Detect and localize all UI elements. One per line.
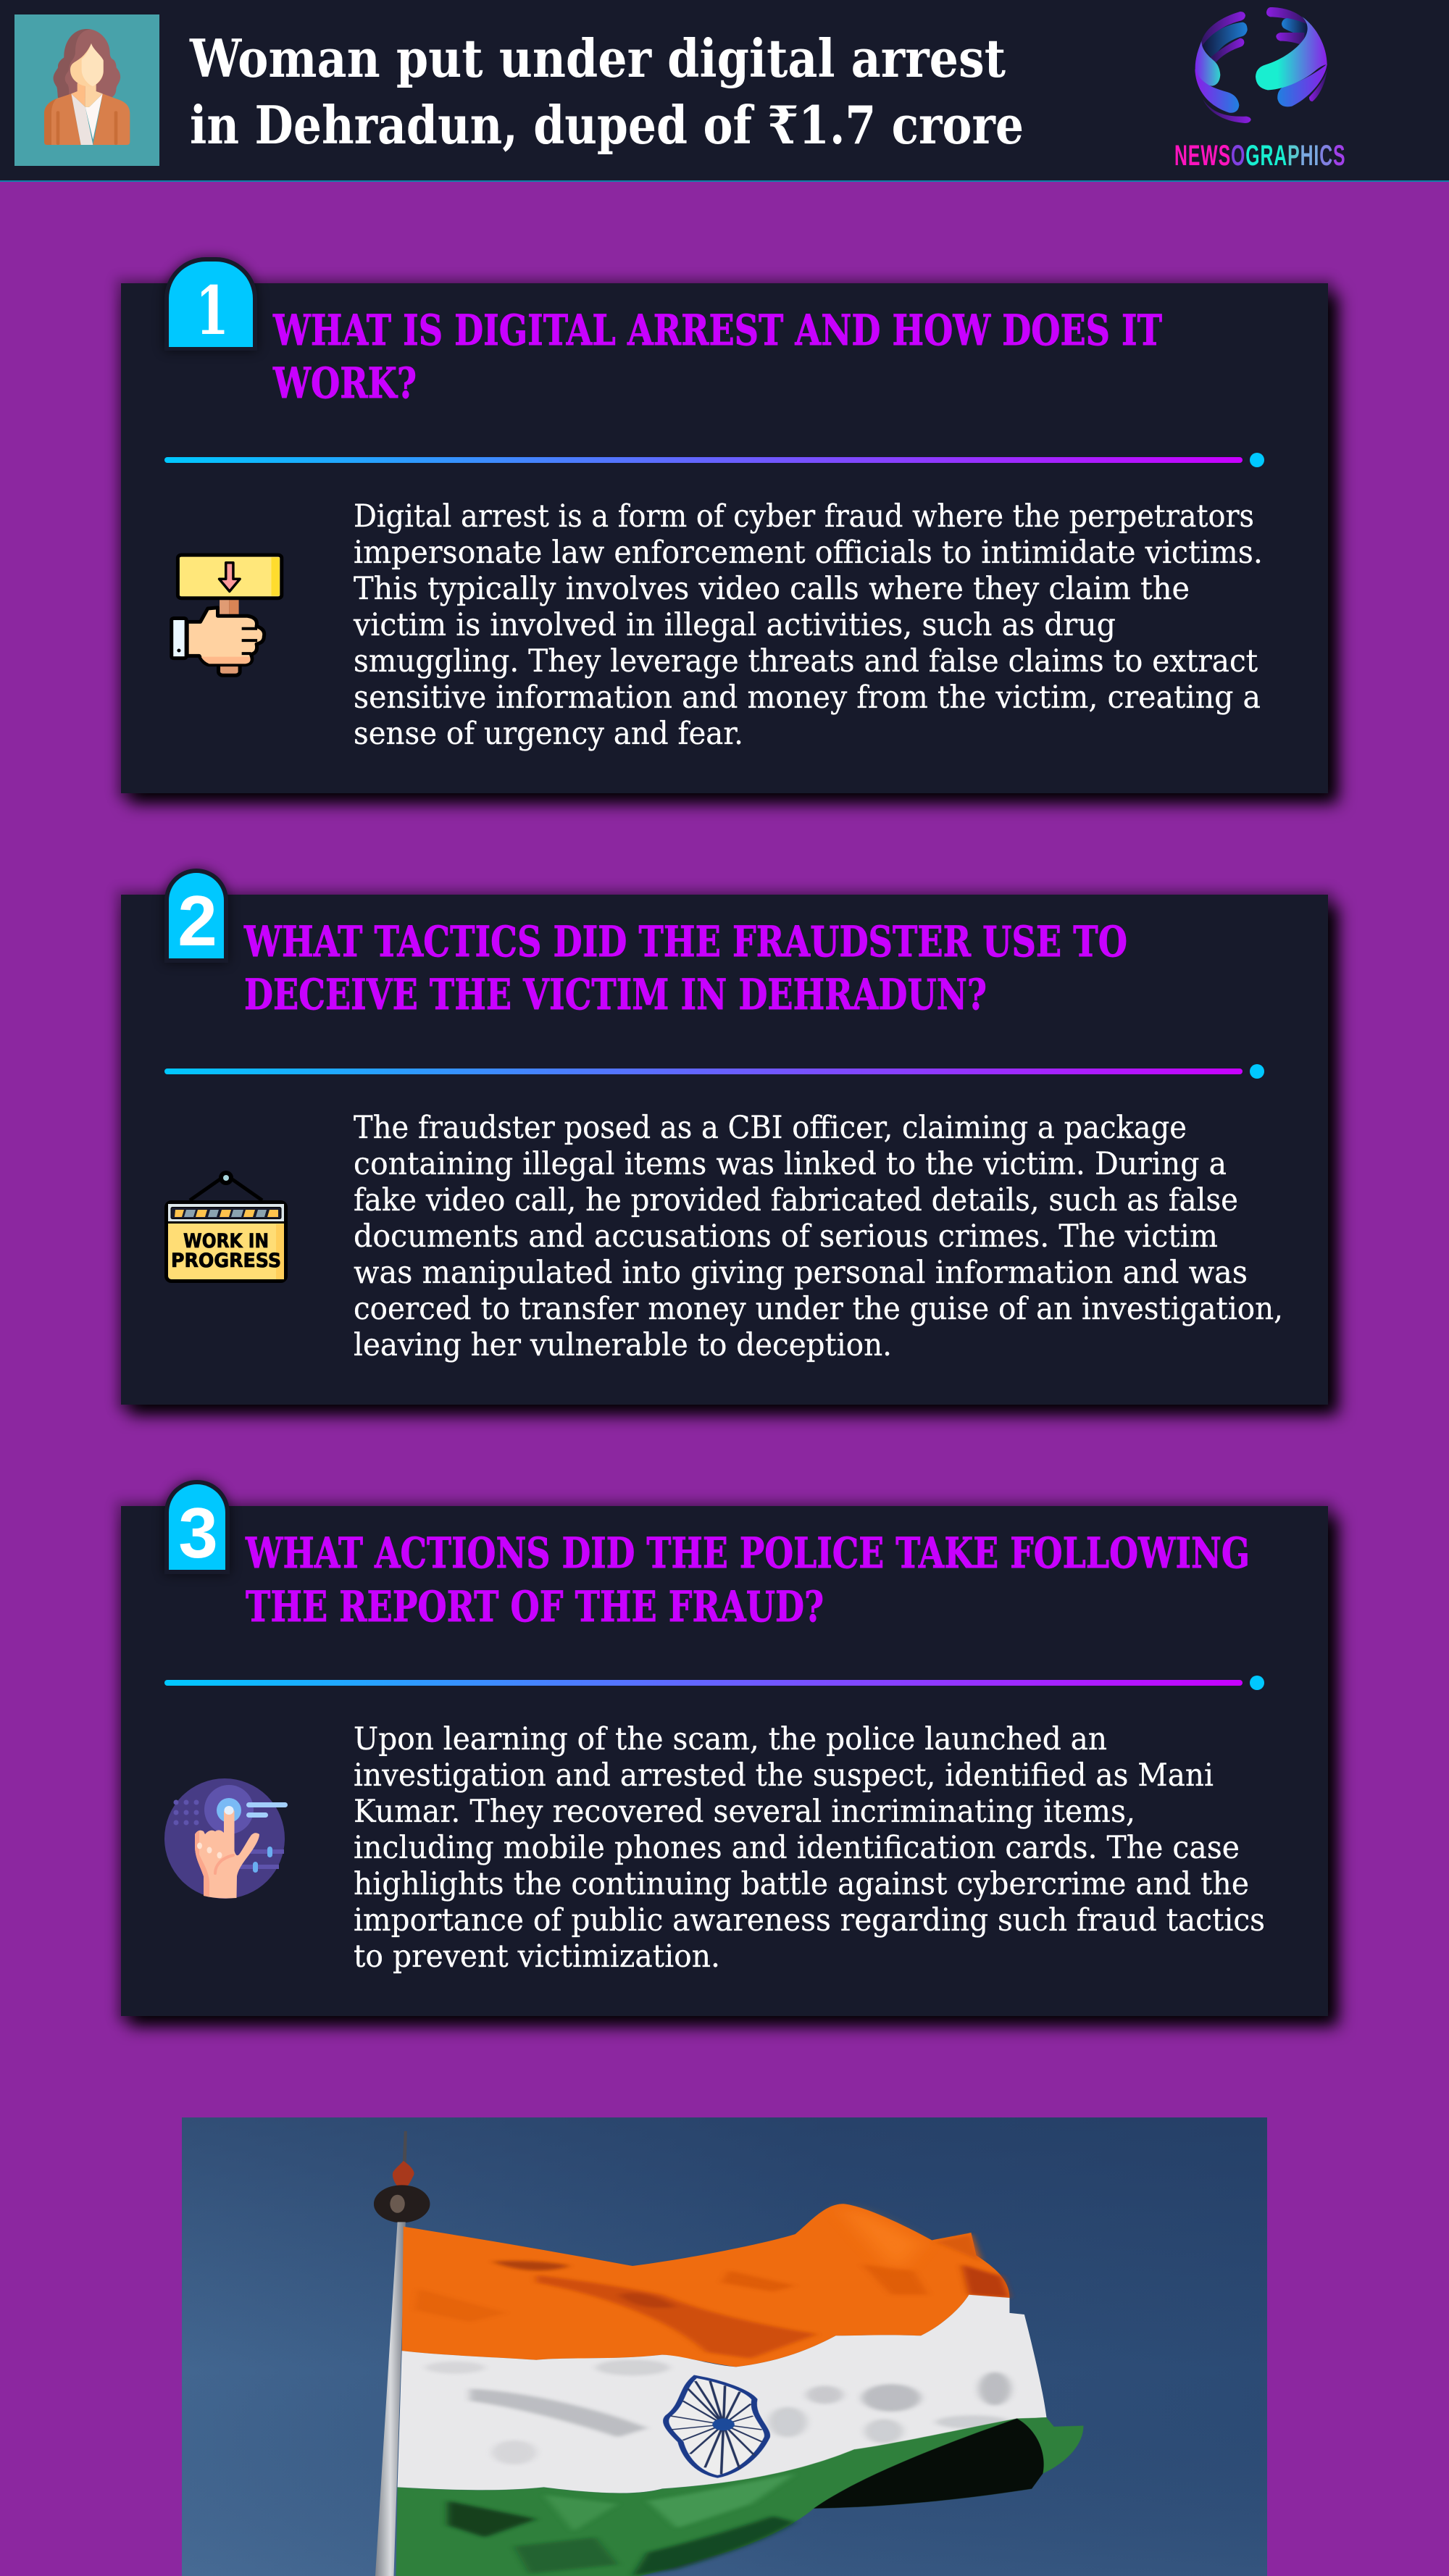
title	[189, 28, 1024, 156]
icon: woman avatar	[14, 14, 159, 166]
body text 2: fake video call, he provided fabricated details, such as false	[354, 1182, 1238, 1218]
flag: green band	[396, 2417, 1084, 2576]
flag: white band	[398, 2295, 1046, 2493]
title: Woman put under digital arrest	[189, 28, 1006, 89]
header bar	[0, 0, 1449, 182]
number badge 1: 1	[196, 272, 229, 350]
title: in Dehradun, duped of ₹1.7 crore	[190, 94, 1024, 156]
body text 1: smuggling. They leverage threats and false claims to extract	[354, 643, 1258, 679]
body text 1: This typically involves video calls where they claim the	[354, 571, 1190, 607]
flag: saffron band	[402, 2204, 1009, 2367]
heading 1	[272, 306, 1162, 408]
icon: work in progress sign: PROGRESS	[171, 1250, 281, 1272]
body text 2: The fraudster posed as a CBI officer, claiming a package	[354, 1110, 1187, 1146]
body text 2: was manipulated into giving personal information and was	[354, 1255, 1248, 1291]
heading 2: DECEIVE THE VICTIM IN DEHRADUN?	[244, 970, 987, 1019]
body text 3: highlights the continuing battle against cybercrime and the	[354, 1866, 1249, 1902]
logo: Newsographics	[1174, 7, 1345, 172]
number badge 2: 2	[178, 881, 217, 961]
body text 2: containing illegal items was linked to the victim. During a	[354, 1146, 1227, 1182]
body text 1	[353, 498, 1263, 752]
panel 2: fraudster tactics	[116, 869, 1338, 1415]
body text 3: Kumar. They recovered several incriminating items,	[354, 1794, 1135, 1830]
body text 2: coerced to transfer money under the guise of an investigation,	[354, 1291, 1283, 1327]
body text 1: victim is involved in illegal activities, such as drug	[353, 607, 1116, 643]
heading 2	[243, 917, 1127, 1019]
body text 3: Upon learning of the scam, the police launched an	[354, 1721, 1107, 1757]
panel 1: what is digital arrest	[116, 257, 1338, 803]
number badge 2	[164, 869, 228, 963]
icon: work in progress sign: WORK IN	[183, 1230, 269, 1253]
body text 2	[354, 1110, 1283, 1363]
heading 1: WHAT IS DIGITAL ARREST AND HOW DOES IT	[272, 306, 1162, 355]
body text 1: Digital arrest is a form of cyber fraud where the perpetrators	[354, 498, 1254, 535]
body text 3	[354, 1721, 1265, 1975]
number badge 3	[164, 1480, 230, 1574]
logo: Newsographics: NEWSOGRAPHICS	[1174, 140, 1345, 172]
body text 1: sense of urgency and fear.	[354, 716, 743, 752]
heading 3	[245, 1529, 1250, 1631]
heading 2: WHAT TACTICS DID THE FRAUDSTER USE TO	[243, 917, 1127, 966]
panel 3: police actions	[116, 1480, 1338, 2026]
icon: hand holding sign	[172, 555, 282, 675]
body text 3: including mobile phones and identification cards. The case	[354, 1830, 1240, 1866]
heading 1: WORK?	[272, 359, 417, 408]
body text 2: leaving her vulnerable to deception.	[354, 1327, 892, 1363]
photo: Indian flag against blue sky	[182, 2117, 1267, 2576]
icon: finger pressing digital button	[164, 1778, 288, 1899]
number badge 1	[164, 257, 257, 351]
body text 2: documents and accusations of serious crimes. The victim	[354, 1218, 1218, 1255]
heading 3: THE REPORT OF THE FRAUD?	[246, 1582, 824, 1631]
number badge 3: 3	[178, 1493, 218, 1573]
body text 3: to prevent victimization.	[354, 1939, 720, 1975]
body text 1: impersonate law enforcement officials to intimidate victims.	[354, 535, 1263, 571]
icon: work in progress sign	[167, 1171, 285, 1281]
body text 3: investigation and arrested the suspect, identified as Mani	[354, 1757, 1214, 1794]
body text 1: sensitive information and money from the victim, creating a	[354, 679, 1261, 716]
flagpole	[374, 2131, 430, 2576]
body text 3: importance of public awareness regarding such fraud tactics	[354, 1902, 1265, 1939]
flag: Ashoka Chakra	[666, 2377, 767, 2477]
